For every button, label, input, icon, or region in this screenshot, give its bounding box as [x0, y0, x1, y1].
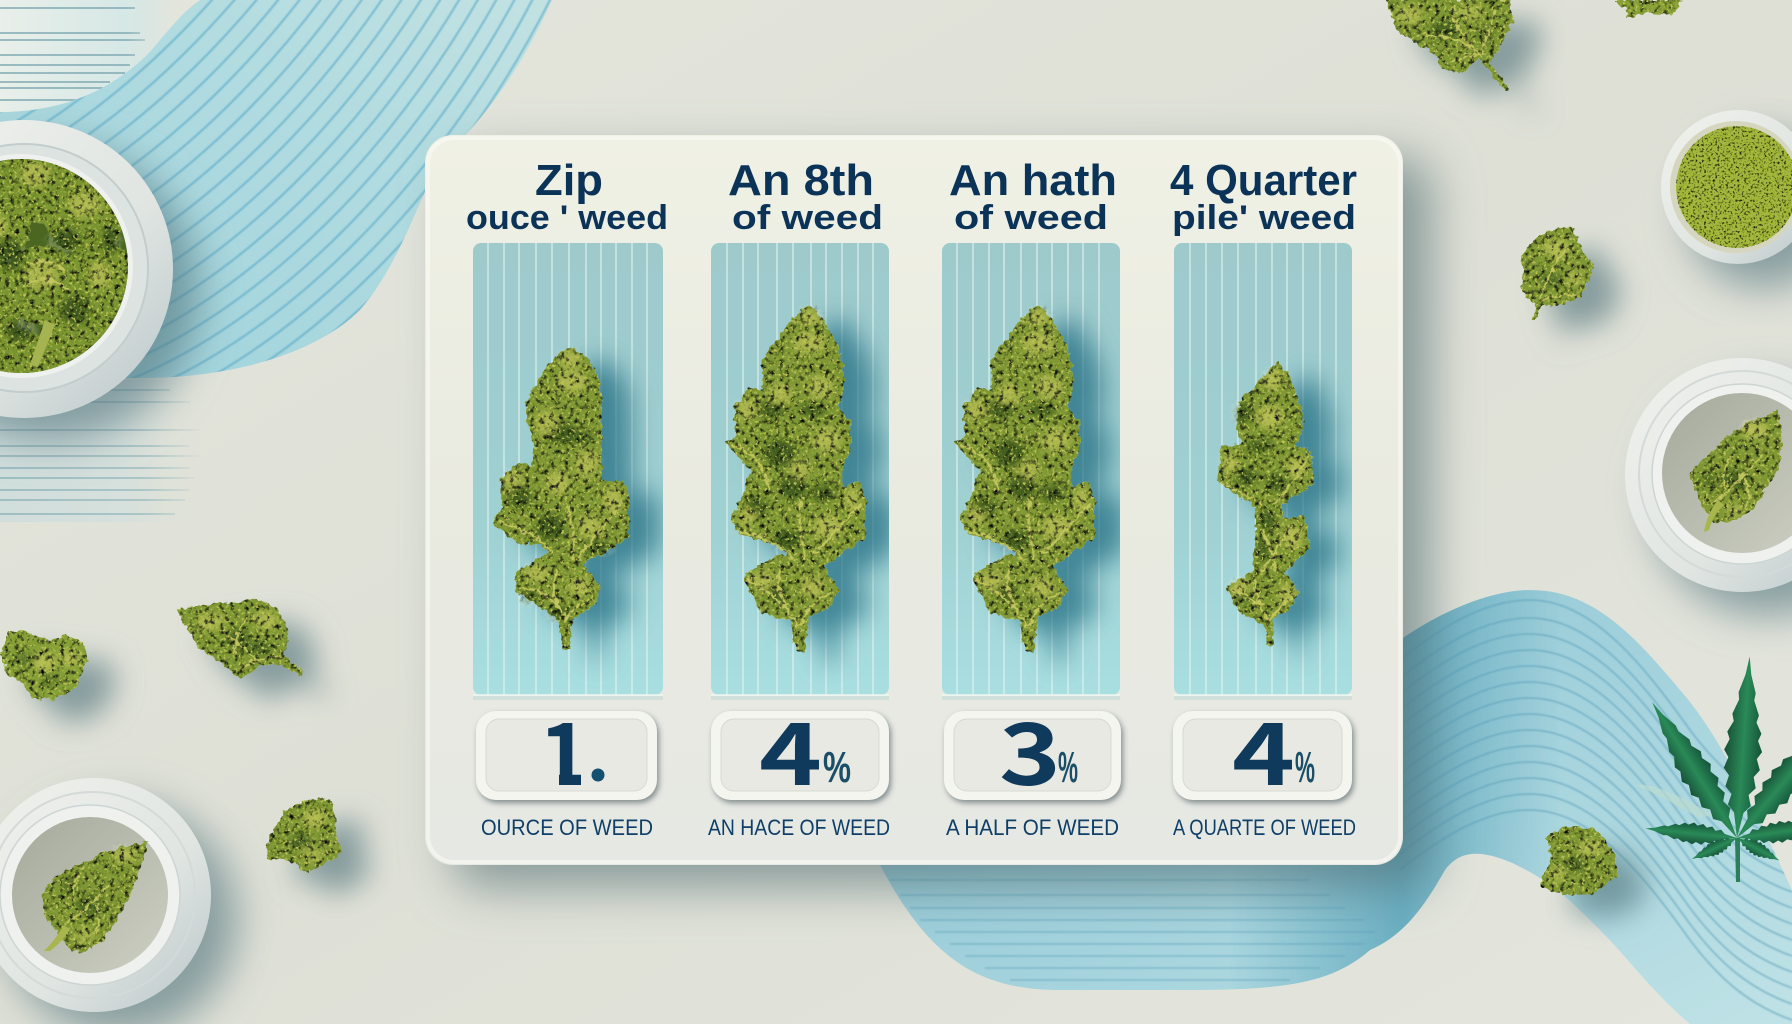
bar with bud	[942, 243, 1120, 700]
bar with bud	[473, 243, 663, 700]
wave: bottom right	[880, 590, 1792, 1024]
value box: 4%: %	[823, 743, 851, 792]
heading: An 8th of weed: An 8th	[728, 156, 874, 205]
bud: on bottom-right wave	[1543, 828, 1617, 893]
value box: 4%	[1173, 685, 1352, 810]
jar: bottom left with bud	[0, 778, 211, 1012]
value box: 3%: %	[1058, 743, 1078, 792]
column 3: half	[942, 156, 1121, 840]
main panel	[425, 135, 1403, 865]
value box: 1.	[474, 710, 663, 807]
label: ounce of weed: OURCE OF WEED	[481, 815, 653, 840]
heading: Zip ouce weed	[466, 156, 668, 237]
wave: top left	[0, 0, 552, 378]
bud: lower left middle	[178, 600, 302, 677]
heading: Zip ouce weed: ouce ' weed	[466, 199, 668, 237]
bud: upper right	[1522, 227, 1593, 319]
label: a half of weed: A HALF OF WEED	[946, 815, 1119, 840]
heading: An hath of weed	[949, 156, 1117, 237]
jar: top left with buds	[0, 120, 173, 418]
heading: An hath of weed: of weed	[954, 199, 1108, 237]
bar with bud	[1174, 243, 1352, 700]
bud: beside bottom-left jar	[268, 800, 341, 872]
bud: left edge	[2, 632, 86, 698]
heading: An 8th of weed: of weed	[732, 199, 883, 237]
column 4: quarter	[1170, 156, 1357, 840]
label: a quarte of weed: A QUARTE OF WEED	[1173, 815, 1356, 840]
value box: 3%: 3	[999, 685, 1061, 810]
jar: right with bud	[1625, 358, 1792, 592]
bar with bud	[711, 243, 889, 700]
heading: Zip ouce weed: Zip	[535, 156, 603, 205]
heading: An hath of weed: An hath	[949, 156, 1117, 205]
value box: 1.: 1	[539, 685, 590, 810]
heading: 4 Quarter pile weed: pile' weed	[1172, 199, 1356, 237]
bud: top right edge	[1387, 0, 1512, 90]
top-left stripes	[0, 0, 175, 112]
label: an hace of weed: AN HACE OF WEED	[708, 815, 890, 840]
value box: 4%: 4	[759, 685, 822, 810]
heading: 4 Quarter pile weed: 4 Quarter	[1170, 156, 1357, 205]
value box: 3%	[944, 685, 1121, 810]
icon: cannabis leaf	[1635, 655, 1792, 882]
column 2: eighth	[708, 156, 890, 840]
heading: An 8th of weed	[728, 156, 883, 237]
value box: 4%: %	[1295, 743, 1315, 792]
bottom-left stripes	[0, 380, 205, 522]
heading: 4 Quarter pile weed	[1170, 156, 1357, 237]
column 1: ounce	[466, 156, 668, 840]
bud: top right small	[1613, 0, 1682, 18]
jar: top right with powder	[1661, 110, 1792, 264]
value box: 4%: 4	[1232, 685, 1295, 810]
value box: 4%	[711, 685, 889, 810]
